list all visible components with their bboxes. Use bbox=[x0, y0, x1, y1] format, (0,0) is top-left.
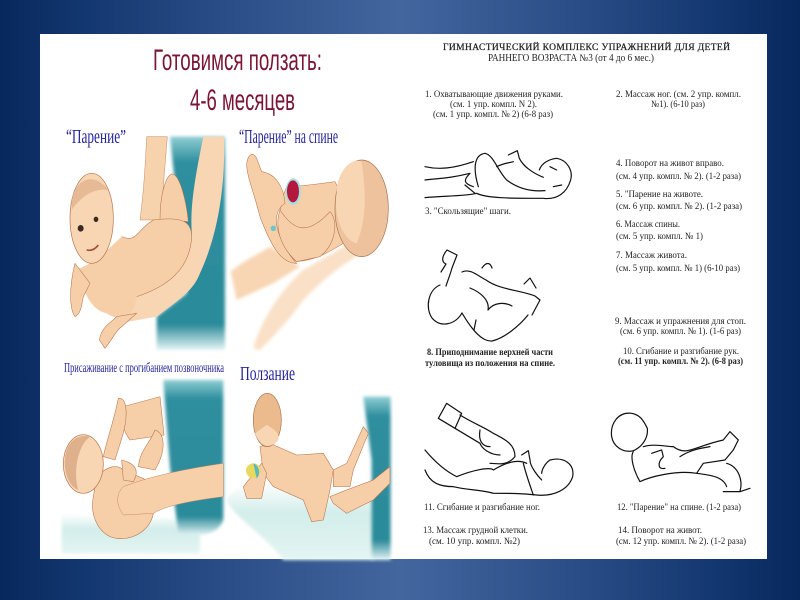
text: exercise 9: (см. 6 упр. компл. № 1). (1-6 раз) bbox=[620, 326, 741, 337]
illustration: baby crawling bbox=[227, 393, 391, 560]
title: gymnastic complex bbox=[443, 41, 730, 64]
title: getting ready to crawl bbox=[153, 44, 322, 117]
text: exercises 4 to 7: (см. 5 упр. компл. № 1) (6-10 раз) bbox=[616, 263, 740, 274]
text: exercise 14: 14. Поворот на живот. bbox=[618, 526, 702, 536]
heading: sitting up with spine arching: Присаживание с прогибанием позвоночника bbox=[64, 361, 224, 376]
text: exercises 4 to 7: (см. 6 упр. компл. № 2). (1-2 раза) bbox=[616, 201, 742, 212]
text: exercise 14: (см. 12 упр. компл. № 2). (1-2 раза) bbox=[616, 536, 746, 547]
text: exercises 4 to 7: 6. Массаж спины. bbox=[616, 220, 680, 230]
text: exercise 8: 8. Приподнимание верхней части bbox=[427, 347, 553, 358]
figure: leg flexion line drawing bbox=[425, 403, 573, 495]
heading: hovering: “Парение” bbox=[66, 126, 126, 148]
text: exercise 1: 1. Охватывающие движения руками. bbox=[425, 90, 563, 100]
text: exercise 2: №1). (6-10 раз) bbox=[651, 99, 705, 110]
text: exercise 3: 3. "Скользящие" шаги. bbox=[425, 207, 511, 217]
title: getting ready to crawl: Готовимся ползать: bbox=[153, 44, 322, 77]
text: exercise 10: (см. 11 упр. компл. № 2). (6-8 раз) bbox=[618, 356, 743, 367]
text: exercise 9 bbox=[615, 317, 746, 337]
figure: raising upper body line drawing bbox=[428, 250, 540, 341]
illustration: baby hovering on stomach bbox=[70, 137, 225, 350]
title: getting ready to crawl: 4-6 месяцев bbox=[190, 84, 295, 117]
white sheet panel bbox=[40, 34, 767, 559]
text: exercises 4 to 7: (см. 5 упр. компл. № 1) bbox=[616, 231, 703, 242]
text: exercise 8 bbox=[425, 347, 555, 369]
text: exercises 4 to 7 bbox=[616, 159, 742, 274]
title: gymnastic complex: ГИМНАСТИЧЕСКИЙ КОМПЛЕКС УПРАЖНЕНИЙ ДЛЯ ДЕТЕЙ bbox=[443, 41, 730, 53]
text: exercise 12: 12. "Парение" на спине. (1-2 раза) bbox=[617, 502, 741, 513]
text: exercise 10 bbox=[618, 346, 743, 367]
text: exercises 4 to 7: 4. Поворот на живот вправо. bbox=[616, 159, 724, 169]
title: gymnastic complex: РАННЕГО ВОЗРАСТА №3 (от 4 до 6 мес.) bbox=[488, 53, 654, 64]
text: exercises 4 to 7: 5. "Парение на животе. bbox=[616, 190, 703, 200]
text: exercises 4 to 7: (см. 4 упр. компл. № 2). (1-2 раза) bbox=[616, 171, 741, 182]
text: exercise 14 bbox=[616, 526, 746, 547]
text: exercises 4 to 7: 7. Массаж живота. bbox=[616, 251, 687, 261]
text: exercise 13: (см. 10 упр. компл. №2) bbox=[429, 536, 520, 547]
text: exercise 2: 2. Массаж ног. (см. 2 упр. компл. bbox=[616, 89, 741, 100]
figure: hovering on back line drawing bbox=[611, 413, 750, 492]
panel: left colour page bbox=[62, 44, 391, 560]
illustration: baby sitting up bbox=[62, 380, 223, 553]
panel: right exercise complex bbox=[423, 41, 750, 547]
text: exercise 10: 10. Сгибание и разгибание рук. bbox=[623, 346, 739, 357]
text: exercise 13 bbox=[423, 525, 528, 547]
figure: leg massage line drawing bbox=[425, 151, 571, 199]
text: exercise 11: 11. Сгибание и разгибание ног. bbox=[424, 502, 540, 513]
heading: crawling: Ползание bbox=[240, 363, 295, 385]
text: exercise 8: туловища из положения на спине. bbox=[425, 359, 555, 369]
text: exercise 2 bbox=[616, 89, 741, 110]
text: exercise 9: 9. Массаж и упражнения для стоп. bbox=[615, 317, 746, 327]
text: exercise 13: 13. Массаж грудной клетки. bbox=[423, 525, 528, 536]
heading: hovering on the back: “Парение” на спине bbox=[239, 126, 338, 148]
illustration: baby hovering on the back bbox=[231, 154, 388, 350]
text: exercise 1: (см. 1 упр. компл. № 2) (6-8 раз) bbox=[433, 109, 553, 120]
text: exercise 1 bbox=[425, 90, 563, 120]
text: exercise 1: (см. 1 упр. компл. N 2). bbox=[450, 99, 537, 110]
